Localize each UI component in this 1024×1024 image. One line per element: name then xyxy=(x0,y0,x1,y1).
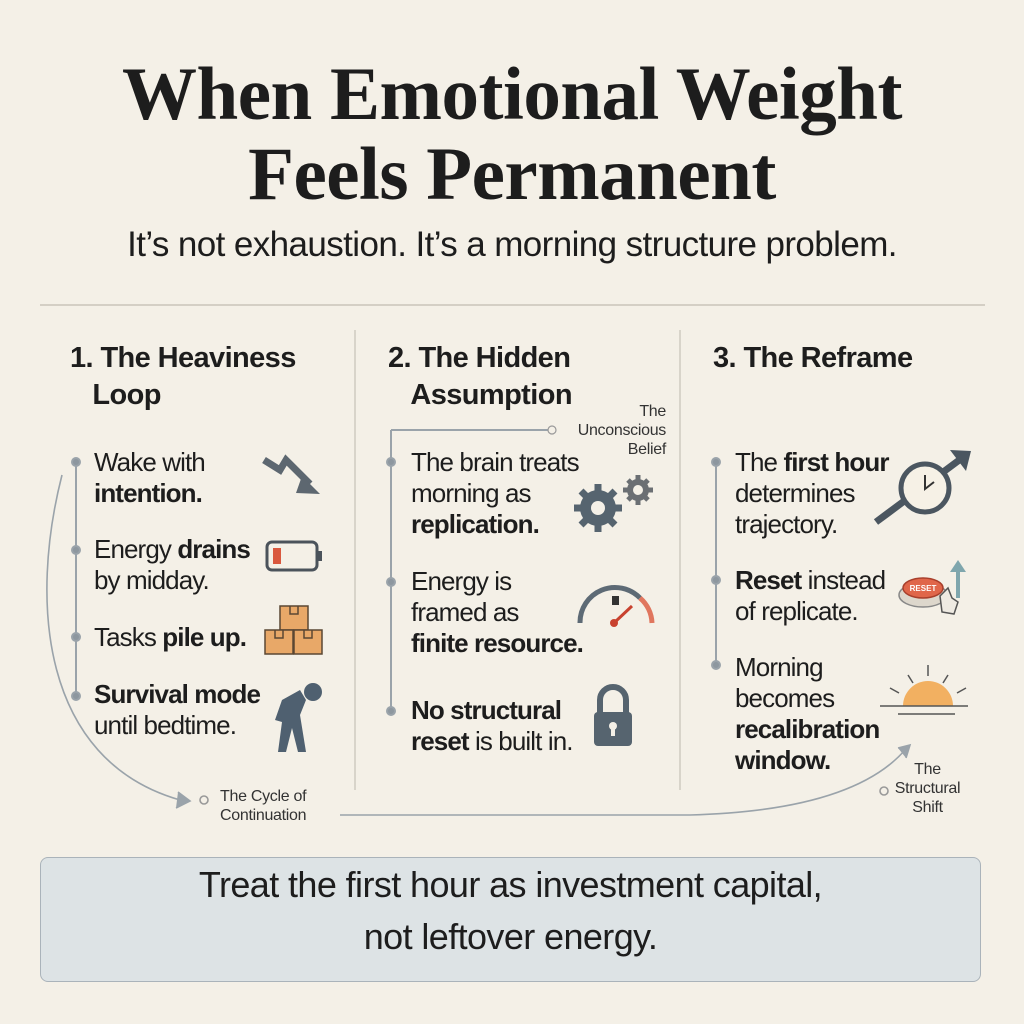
panel: hidden assumption: framed as xyxy=(411,597,519,627)
callout: not leftover energy. xyxy=(364,916,657,957)
panel: reframe xyxy=(713,342,960,816)
panel: reframe: recalibration xyxy=(735,714,879,744)
label: unconscious belief xyxy=(578,403,666,458)
callout xyxy=(40,857,981,982)
panel: reframe: window. xyxy=(735,745,830,775)
label: unconscious belief: Belief xyxy=(628,441,666,458)
icon: reset button xyxy=(899,560,966,614)
panel: hidden assumption: No structural xyxy=(411,695,561,725)
arrow: cycle xyxy=(47,475,208,808)
items: intention. xyxy=(94,478,202,508)
icon: tired person xyxy=(275,683,322,752)
items xyxy=(94,447,205,508)
heading 2: Assumption xyxy=(410,379,572,411)
timeline lines xyxy=(72,430,720,715)
panel: heaviness loop xyxy=(70,342,307,824)
label: cycle: The Cycle of xyxy=(220,788,306,805)
panel: heaviness loop: Tasks pile up. xyxy=(94,622,246,652)
panel: hidden assumption: Energy is xyxy=(411,566,511,596)
icon: battery xyxy=(267,542,322,570)
icon: reset button: RESET xyxy=(910,584,936,593)
label: structural shift: The xyxy=(914,761,941,778)
icon: boxes xyxy=(265,606,322,654)
items xyxy=(735,447,890,539)
items: Wake with xyxy=(94,447,205,477)
icon: clock with arrow xyxy=(876,450,971,522)
icon: sunrise xyxy=(880,665,968,714)
subtitle: It’s not exhaustion. It’s a morning structure problem. xyxy=(127,225,897,264)
icon: gauge xyxy=(580,587,652,627)
arrow: structural shift xyxy=(340,745,910,815)
heading 1: 1. The Heaviness xyxy=(70,342,296,374)
label: cycle: Continuation xyxy=(220,807,306,824)
label: structural shift: Structural xyxy=(895,780,960,797)
panel: heaviness loop: Energy drains xyxy=(94,534,250,564)
icon: padlock xyxy=(594,687,632,746)
label: structural shift: Shift xyxy=(912,799,943,816)
panel: reframe: of replicate. xyxy=(735,596,858,626)
panel: heaviness loop: by midday. xyxy=(94,565,209,595)
heading 1 xyxy=(70,342,296,411)
heading 2: 2. The Hidden xyxy=(388,342,570,374)
label: cycle xyxy=(220,788,307,824)
items: determines xyxy=(735,478,855,508)
heading 3: 3. The Reframe xyxy=(713,342,913,374)
items xyxy=(411,447,579,539)
items: The first hour xyxy=(735,447,889,477)
panel: hidden assumption xyxy=(388,342,666,756)
title xyxy=(122,53,902,216)
label: unconscious belief: The xyxy=(639,403,666,420)
title: Feels Permanent xyxy=(248,133,776,216)
items: replication. xyxy=(411,509,539,539)
heading 1: Loop xyxy=(92,379,161,411)
heading 2 xyxy=(388,342,572,411)
panel: reframe: Morning xyxy=(735,652,823,682)
icon: zigzag down arrow xyxy=(264,460,320,494)
panel: reframe: becomes xyxy=(735,683,834,713)
icon: gears xyxy=(574,475,653,532)
panel: hidden assumption: reset is built in. xyxy=(411,726,573,756)
items: trajectory. xyxy=(735,509,837,539)
panel: heaviness loop: Survival mode xyxy=(94,679,260,709)
title: When Emotional Weight xyxy=(122,53,902,136)
items: morning as xyxy=(411,478,531,508)
callout: Treat the first hour as investment capital, xyxy=(199,864,822,905)
panel: hidden assumption: finite resource. xyxy=(411,628,583,658)
label: structural shift xyxy=(895,761,960,816)
panel: reframe: Reset instead xyxy=(735,565,885,595)
panel: heaviness loop: until bedtime. xyxy=(94,710,236,740)
items: The brain treats xyxy=(411,447,579,477)
label: unconscious belief: Unconscious xyxy=(578,422,666,439)
